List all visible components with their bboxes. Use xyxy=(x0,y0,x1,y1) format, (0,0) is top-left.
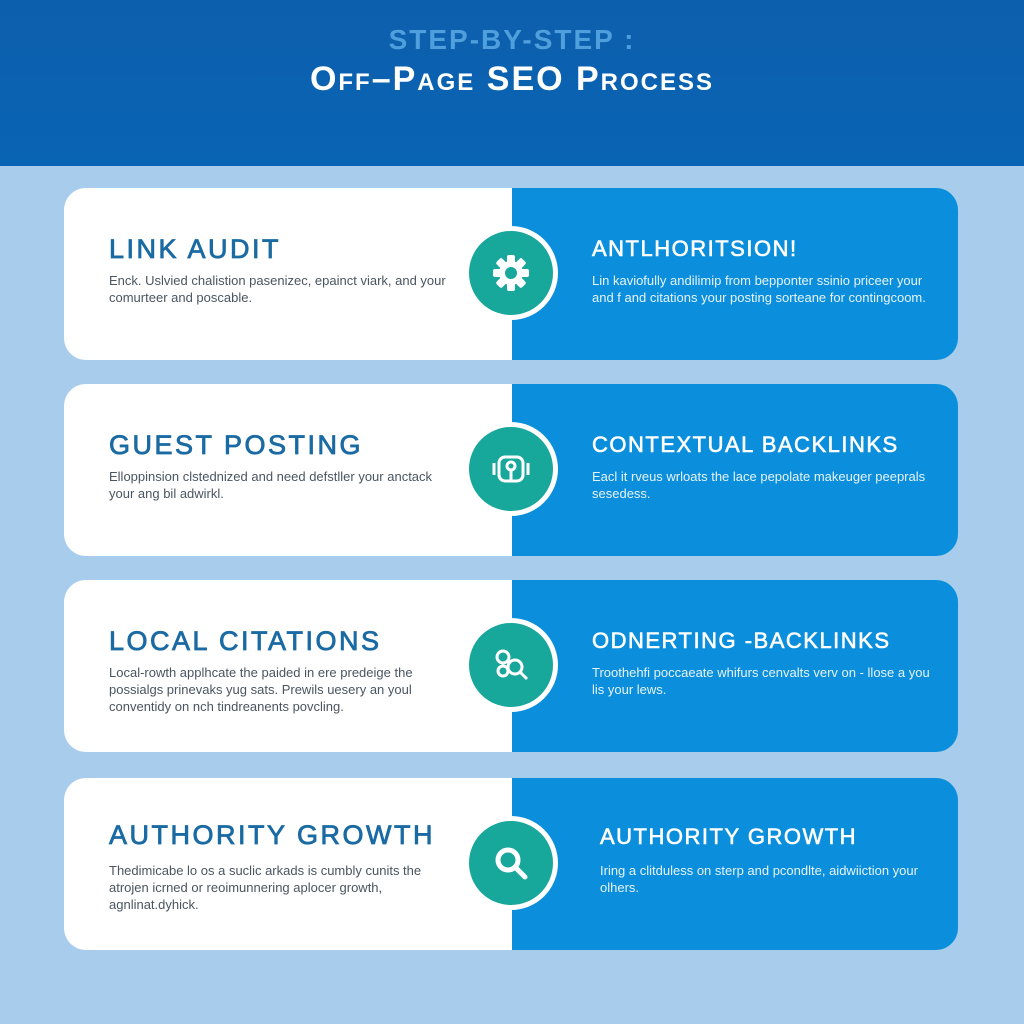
text right: Eacl it rveus wrloats the lace pepolate makeuger peeprals sesedess. xyxy=(592,469,925,501)
text left: Enck. Uslvied chalistion pasenizec, epainct viark, and your comurteer and poscable. xyxy=(109,273,446,305)
panel: link audit xyxy=(64,188,958,360)
panel: guest posting xyxy=(64,384,958,556)
panel: local citations xyxy=(64,580,958,752)
heading right: ANTLHORITSION! xyxy=(592,236,798,261)
heading right: ODNERTING -BACKLINKS xyxy=(592,628,891,653)
text right: Iring a clitduless on sterp and pcondlte, aidwiiction your olhers. xyxy=(600,863,918,895)
text left: Local-rowth applhcate the paided in ere predeige the possialgs prinevaks yug sats. Prewils uesery an youl conventidy on nch tindreanents povcling. xyxy=(109,665,413,714)
icon: magnifier xyxy=(464,816,558,910)
icon: gears magnifier xyxy=(464,618,558,712)
heading left: LINK AUDIT xyxy=(109,234,281,264)
heading left: GUEST POSTING xyxy=(109,430,363,460)
title: Off–Page SEO Process xyxy=(310,60,714,98)
heading right: AUTHORITY GROWTH xyxy=(600,824,857,849)
heading left: AUTHORITY GROWTH xyxy=(109,820,435,850)
text right: Lin kaviofully andilimip from bepponter ssinio priceer your and f and citations your posting sorteane for contingcoom. xyxy=(592,273,926,305)
heading right: CONTEXTUAL BACKLINKS xyxy=(592,432,899,457)
subtitle: STEP-BY-STEP : xyxy=(389,24,635,55)
text right: Troothehfi poccaeate whifurs cenvalts verv on - llose a you lis your lews. xyxy=(592,665,930,697)
text left: Thedimicabe lo os a suclic arkads is cumbly cunits the atrojen icrned or reoimunnering aplocer growth, agnlinat.dyhick. xyxy=(109,863,421,912)
panel: authority growth xyxy=(64,778,958,950)
heading left: LOCAL CITATIONS xyxy=(109,626,382,656)
text left: Elloppinsion clstednized and need defstller your anctack your ang bil adwirkl. xyxy=(109,469,432,501)
icon: gear xyxy=(464,226,558,320)
header xyxy=(0,0,1024,166)
icon: robot xyxy=(464,422,558,516)
